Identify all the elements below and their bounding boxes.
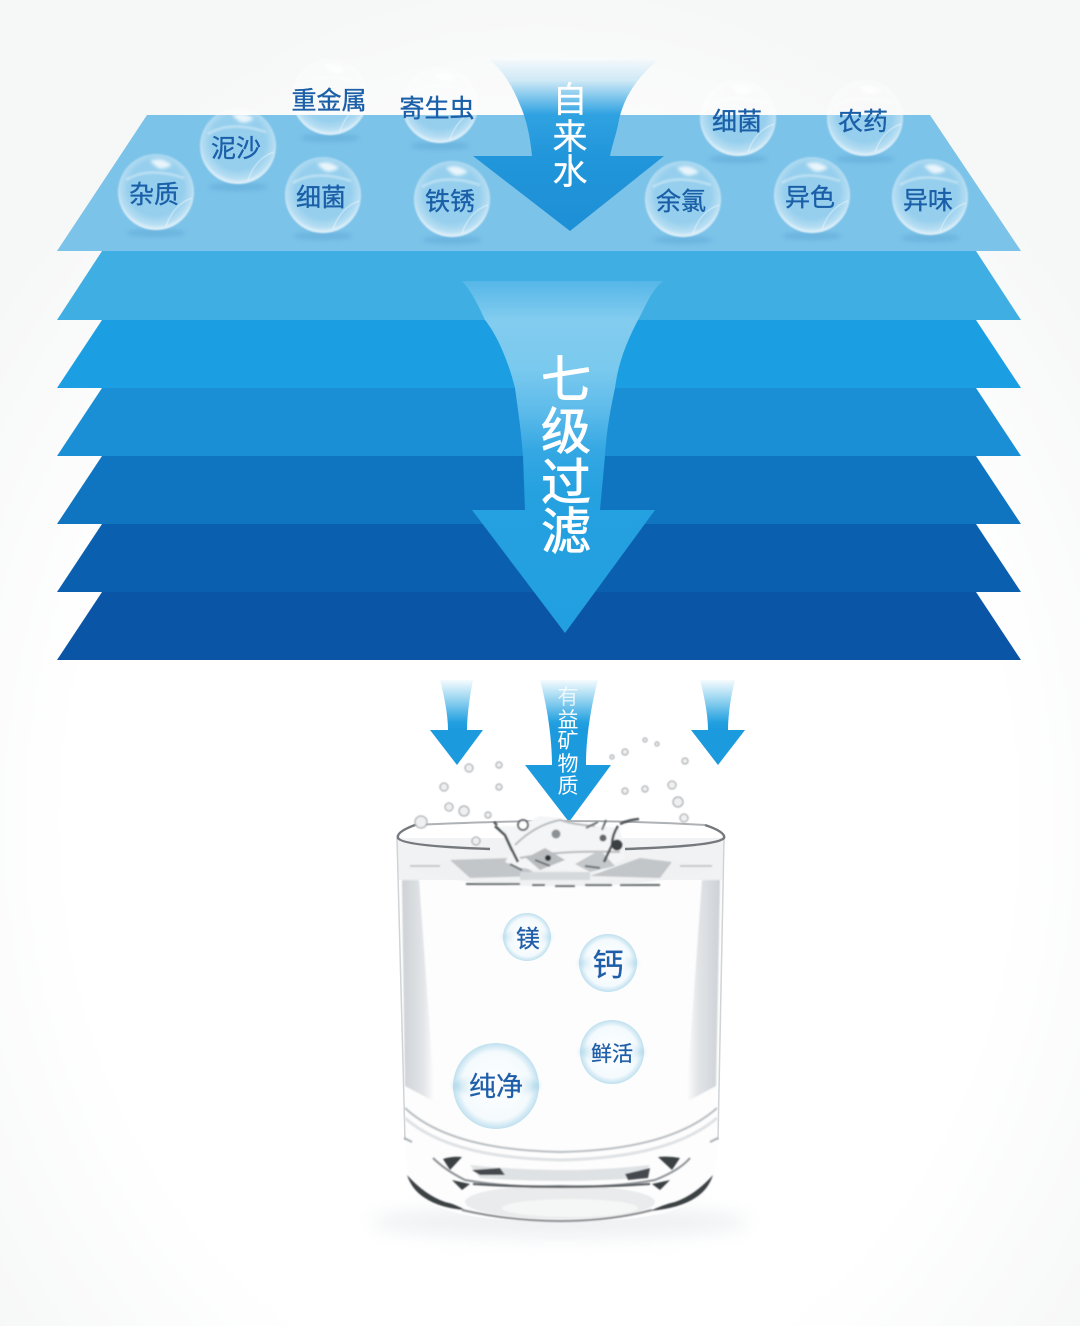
arrow label: beneficial minerals: 质 (558, 775, 578, 798)
bubble: 细菌 left: 细菌 (296, 184, 346, 212)
bubble: 余氯 (645, 161, 721, 244)
bubble: 异味: 异味 (903, 187, 953, 215)
water splash (494, 816, 639, 872)
water surface (405, 856, 716, 886)
bubble: 异味 (892, 159, 968, 242)
glass body (397, 838, 724, 1222)
bubble: 铁锈: 铁锈 (425, 188, 475, 216)
arrow label: beneficial minerals: 益 (558, 709, 578, 732)
dark glints (443, 1157, 462, 1170)
arrow label: seven-stage filtration: 级 (541, 404, 591, 460)
bubble: 重金属: 重金属 (291, 87, 367, 115)
mineral ball: 钙: 钙 (592, 948, 624, 983)
bubble: 异色: 异色 (785, 184, 835, 212)
water bottom curve (404, 1108, 718, 1160)
layer 7 (57, 592, 1021, 660)
mineral ball: 鲜活: 鲜活 (591, 1043, 633, 1066)
layer 3 (57, 320, 1021, 388)
arrow label: beneficial minerals: 有 (558, 686, 578, 709)
layer 5 (57, 456, 1021, 524)
arrow label: beneficial minerals: 矿 (558, 730, 578, 753)
bubble: 农药: 农药 (838, 108, 888, 136)
mineral ball: 钙 (579, 934, 637, 992)
arrow label: beneficial minerals: 物 (558, 753, 578, 776)
arrow label: tap water: 水 (552, 153, 588, 192)
arrow label: tap water: 自 (552, 81, 588, 120)
mineral ball: 镁 (503, 913, 551, 961)
wall lines (397, 838, 724, 1140)
mineral ball: 鲜活 (580, 1020, 644, 1084)
bubble: 细菌 right: 细菌 (712, 108, 762, 136)
glass rim (398, 821, 724, 849)
arrow: beneficial minerals (525, 680, 611, 822)
outer dark crescents (407, 1175, 465, 1210)
arrow label: tap water: 来 (552, 118, 588, 157)
arrow label: seven-stage filtration: 七 (541, 352, 591, 408)
impurity bubbles (118, 59, 968, 244)
arrow: seven-stage filtration (462, 281, 663, 633)
bubble: 杂质 (118, 154, 194, 237)
mineral ball: 纯净: 纯净 (469, 1072, 523, 1102)
bubble: 异色 (774, 157, 850, 240)
bubble: 寄生虫 (399, 67, 478, 150)
bubble: 细菌 right (700, 80, 776, 163)
arrow: tap water (473, 60, 664, 231)
bubble: 重金属 (291, 59, 368, 142)
bubble: 泥沙: 泥沙 (211, 135, 261, 163)
water right side (686, 880, 720, 1102)
glass of water (370, 738, 750, 1238)
layer 1 (57, 115, 1021, 251)
bubble: 泥沙 (200, 108, 276, 191)
glass base (407, 1157, 713, 1221)
arrow label: seven-stage filtration: 过 (541, 455, 591, 511)
bubble: 细菌 left (285, 157, 361, 240)
base central oval (465, 1185, 655, 1219)
bubble: 杂质: 杂质 (129, 181, 179, 209)
layer 6 (57, 524, 1021, 592)
mineral ball: 纯净 (453, 1043, 539, 1129)
arrow label: seven-stage filtration: 滤 (541, 504, 591, 560)
mineral ball: 镁: 镁 (516, 926, 540, 953)
bubble: 余氯: 余氯 (656, 188, 706, 216)
water left side (402, 880, 435, 1102)
layer 2 (57, 251, 1021, 320)
water droplets (415, 738, 688, 845)
bubble: 寄生虫: 寄生虫 (399, 95, 475, 123)
bubble: 农药 (827, 80, 903, 163)
glass shadow (370, 1206, 750, 1238)
upper wall tint (397, 838, 724, 880)
filter layers stack (57, 115, 1021, 660)
bubble: 铁锈 (414, 161, 490, 244)
arrow: right mineral (691, 680, 745, 765)
layer 4 (57, 388, 1021, 456)
inner ring (433, 1158, 690, 1186)
arrow: left mineral (430, 680, 483, 765)
